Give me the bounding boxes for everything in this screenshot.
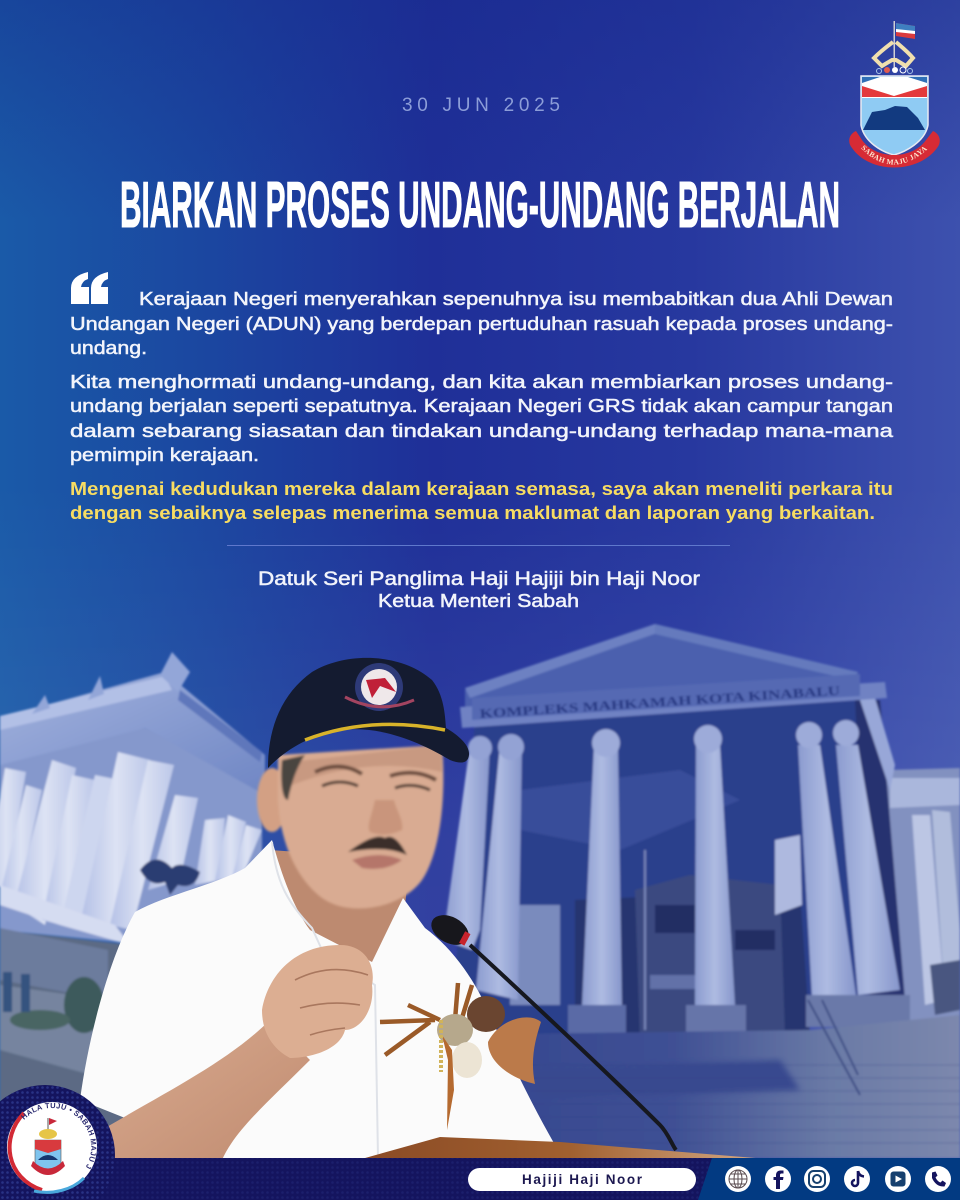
quote: paragraph 1: Undangan Negeri (ADUN) yang berdepan pertuduhan rasuah kepada proses undang- bbox=[70, 314, 893, 334]
neck bbox=[270, 850, 410, 965]
beads bbox=[876, 67, 912, 74]
Sabah coat of arms bbox=[849, 21, 940, 168]
badge: Hala Tuju Sabah Maju Jaya bbox=[0, 1085, 115, 1199]
quote: highlighted paragraph: Mengenai kedudukan mereka dalam kerajaan semasa, saya akan meneliti perkara itu bbox=[70, 479, 893, 499]
white shirt bbox=[80, 840, 555, 1160]
quote: highlighted paragraph: dengan sebaiknya selepas menerima semua maklumat dan laporan yang berkaitan. bbox=[70, 503, 875, 523]
shield bbox=[861, 76, 928, 155]
court building: Kompleks Mahkamah Kota Kinabalu bbox=[440, 624, 960, 1158]
quote: highlighted paragraph bbox=[70, 479, 893, 523]
name pill: Hajiji Haji Noor bbox=[522, 1172, 643, 1187]
date: 30 JUN 2025 bbox=[402, 95, 560, 116]
cap bbox=[268, 658, 469, 768]
icon: facebook bbox=[765, 1166, 791, 1192]
speaker attribution bbox=[258, 568, 701, 611]
corsage bbox=[380, 983, 541, 1130]
quote: paragraph 1: Kerajaan Negeri menyerahkan sepenuhnya isu membabitkan dua Ahli Dewan bbox=[139, 289, 893, 309]
left wing columns bbox=[0, 752, 262, 945]
quote: paragraph 2: Kita menghormati undang-undang, dan kita akan membiarkan proses undang- bbox=[70, 372, 893, 392]
flag bbox=[894, 21, 915, 67]
pedestals bbox=[568, 995, 910, 1035]
right wing bbox=[885, 768, 960, 1020]
speaker attribution: Ketua Menteri Sabah bbox=[378, 591, 579, 611]
badge crest bbox=[31, 1118, 65, 1175]
court name on entablature: KOMPLEKS MAHKAMAH KOTA KINABALU bbox=[479, 683, 841, 721]
lectern bbox=[358, 1137, 780, 1160]
speaker attribution: Datuk Seri Panglima Haji Hajiji bin Haji Noor bbox=[258, 568, 701, 590]
icon: tiktok bbox=[844, 1166, 870, 1192]
icon: phone bbox=[925, 1166, 951, 1192]
icon: website bbox=[725, 1166, 751, 1192]
scroll with motto bbox=[849, 131, 940, 168]
interior shadow bbox=[450, 700, 895, 1040]
microphone bbox=[426, 909, 676, 1150]
arms and hands bbox=[874, 42, 913, 66]
icon: instagram bbox=[804, 1166, 830, 1192]
quote: paragraph 2 bbox=[70, 372, 894, 465]
name pill bbox=[468, 1168, 696, 1191]
icon: youtube bbox=[885, 1166, 911, 1192]
quote: paragraph 2: pemimpin kerajaan. bbox=[70, 445, 259, 465]
bottom bar bbox=[0, 1158, 960, 1200]
stairs bbox=[440, 1000, 960, 1158]
quote: paragraph 2: dalam sebarang siasatan dan tindakan undang-undang terhadap mana-mana bbox=[70, 421, 894, 441]
quote: paragraph 2: undang berjalan seperti sepatutnya. Kerajaan Negeri GRS tidak akan campur tangan bbox=[70, 396, 893, 416]
columns bbox=[443, 720, 900, 1005]
court building: left wing bbox=[0, 652, 270, 1160]
head bbox=[257, 745, 443, 908]
icon: quotation mark bbox=[71, 272, 108, 304]
scroll with motto: SABAH MAJU JAYA bbox=[861, 146, 928, 165]
person: Datuk Seri Panglima Haji Hajiji bin Haji Noor bbox=[80, 658, 780, 1160]
quote: paragraph 1 bbox=[70, 289, 893, 358]
forearm and hand bbox=[105, 945, 373, 1160]
pediment bbox=[460, 624, 887, 728]
quote: paragraph 1: undang. bbox=[70, 338, 147, 358]
